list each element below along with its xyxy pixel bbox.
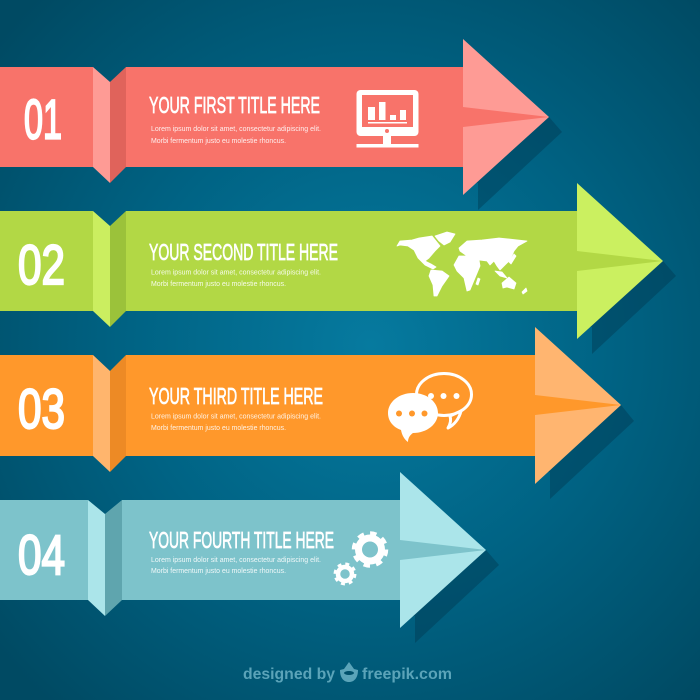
body text 3: [151, 412, 321, 432]
title 3: YOUR THIRD TITLE HERE: [149, 383, 323, 409]
arrow 3: orange: [0, 327, 634, 499]
arrow 3 shadow: [0, 398, 634, 499]
arrow 3 left band: [0, 355, 93, 456]
number 03: 03: [18, 377, 65, 440]
body text 4: Morbi fermentum justo eu molestie rhoncus.: [151, 566, 286, 575]
body text 2: Morbi fermentum justo eu molestie rhoncus.: [151, 279, 286, 288]
number 01: 01: [24, 88, 62, 150]
arrow 4 fold: [88, 500, 122, 616]
body text 4: [151, 555, 321, 575]
body text 3: Lorem ipsum dolor sit amet, consectetur adipiscing elit.: [151, 412, 321, 420]
arrow 1 shadow: [0, 110, 562, 210]
title 2: YOUR SECOND TITLE HERE: [149, 239, 338, 265]
icon: gears: [335, 534, 386, 584]
body text 2: Lorem ipsum dolor sit amet, consectetur adipiscing elit.: [151, 268, 321, 276]
title 1: YOUR FIRST TITLE HERE: [149, 92, 320, 118]
body text 1: Morbi fermentum justo eu molestie rhoncus.: [151, 136, 286, 145]
arrow 2 main band: [126, 211, 578, 311]
footer text left: designed by: [243, 666, 335, 683]
arrow 1 main band: [126, 67, 464, 167]
arrow 1 fold: [93, 67, 126, 183]
arrow 1: coral: [0, 39, 562, 210]
icon: freepik logo: [340, 662, 358, 682]
body text 2: [151, 268, 321, 288]
arrow 4 left band: [0, 500, 88, 600]
footer credit: [243, 662, 452, 683]
arrow 4 head: [400, 472, 486, 628]
arrow 4 shadow: [0, 543, 499, 643]
arrow 3 fold: [93, 355, 126, 472]
body text 4: Lorem ipsum dolor sit amet, consectetur adipiscing elit.: [151, 555, 321, 564]
title 4: YOUR FOURTH TITLE HERE: [149, 527, 334, 553]
icon: world map: [397, 232, 527, 296]
arrow 4 main band: [122, 500, 401, 600]
footer text right: freepik.com: [362, 666, 452, 683]
arrow 3 head: [535, 327, 621, 484]
arrow 2 shadow: [0, 254, 676, 354]
arrow 1 left band: [0, 67, 93, 167]
arrow 2 fold: [93, 211, 126, 327]
arrow 2 left band: [0, 211, 93, 311]
icon: monitor with bar chart: [356, 90, 418, 148]
number 02: 02: [18, 233, 65, 296]
body text 1: Lorem ipsum dolor sit amet, consectetur adipiscing elit.: [151, 124, 321, 133]
arrow 3 main band: [126, 355, 536, 456]
body text 1: [151, 124, 321, 145]
body text 3: Morbi fermentum justo eu molestie rhoncus.: [151, 423, 286, 432]
arrow 2: green: [0, 183, 676, 354]
arrow 2 head: [577, 183, 663, 339]
icon: chat bubbles: [388, 374, 472, 442]
number 04: 04: [18, 523, 65, 586]
arrow 4: light blue: [0, 472, 499, 643]
arrow 1 head: [463, 39, 549, 195]
